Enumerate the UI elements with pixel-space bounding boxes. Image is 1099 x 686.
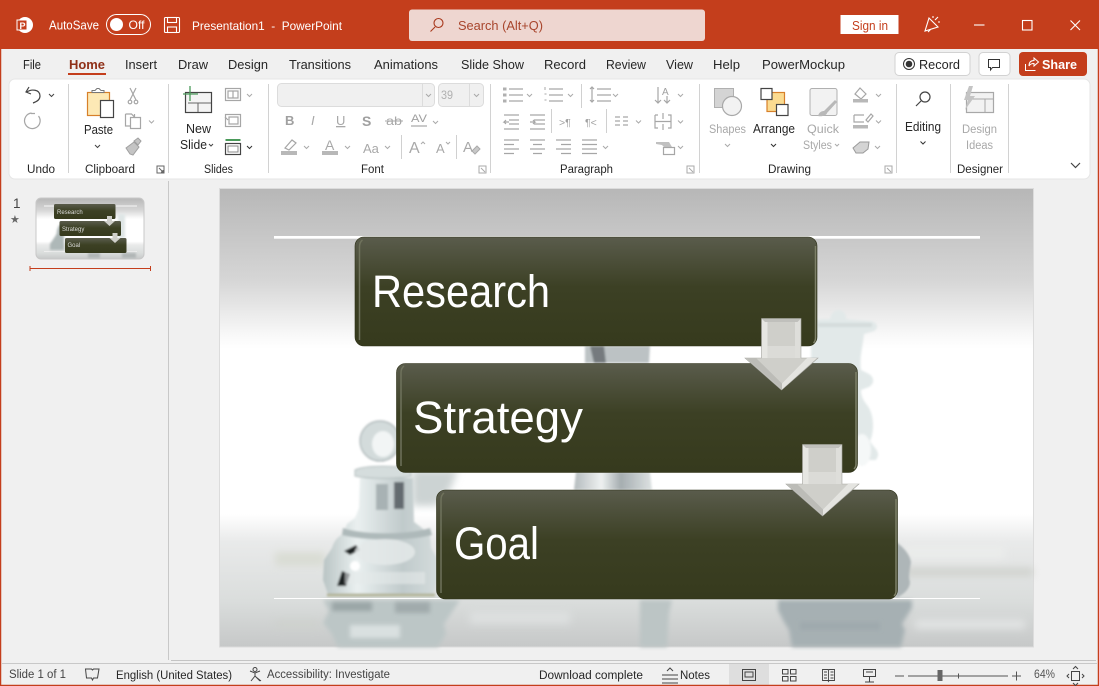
thumbnail position indicator <box>30 266 150 271</box>
accessibility status: Accessibility: Investigate <box>267 669 390 681</box>
group: slides: Slide <box>180 138 207 152</box>
group: font: A <box>463 139 473 156</box>
record button <box>895 52 970 76</box>
group: slides: Slides <box>204 164 233 176</box>
star marker: ★ <box>10 214 20 226</box>
ribbon tabs: View <box>666 58 694 72</box>
group: font: A <box>436 141 445 156</box>
group: slides: New <box>186 122 212 136</box>
slide count: Slide 1 of 1 <box>9 669 66 681</box>
group: font: AV <box>411 113 428 125</box>
group: font: ab <box>386 114 402 128</box>
step: Research <box>355 237 817 346</box>
slide thumbnail <box>36 198 144 259</box>
group: designer: Design <box>962 124 997 136</box>
icon: celebrate <box>925 16 940 32</box>
group: font: S <box>362 113 371 129</box>
right queen <box>811 310 878 466</box>
arrow: Research to Strategy <box>745 318 818 390</box>
step: Research: Research <box>372 266 550 317</box>
search box: Search (Alt+Q) <box>458 19 543 33</box>
group: font: Font <box>361 164 385 176</box>
group: slides <box>180 86 252 176</box>
ribbon tabs: File <box>23 58 41 72</box>
group: clipboard: Clipboard <box>85 164 135 176</box>
reflections <box>323 600 912 647</box>
collapse ribbon chevron <box>1071 163 1080 168</box>
group dividers <box>68 84 1008 173</box>
slide <box>220 188 1034 647</box>
zoom percent: 64% <box>1034 669 1055 681</box>
icon: spell check <box>86 669 99 680</box>
group: paragraph <box>503 84 694 176</box>
slide thumbnail: Strategy <box>62 227 84 233</box>
document title: Presentation1 - PowerPoint <box>192 19 343 33</box>
thumbnail pane <box>10 196 150 271</box>
ribbon tabs: Transitions <box>289 58 351 72</box>
ribbon tabs: Home <box>69 58 105 72</box>
ribbon tabs: Draw <box>178 58 209 72</box>
icon: PowerPoint logo: P <box>20 21 26 31</box>
autosave toggle: Off <box>128 18 145 32</box>
photo: glass chess pieces <box>275 310 1033 647</box>
group: clipboard <box>84 88 164 176</box>
group: font: 39 <box>441 90 453 102</box>
group: designer: Ideas <box>966 140 993 152</box>
group: drawing: Arrange <box>753 122 795 136</box>
group: drawing: Styles <box>803 140 832 152</box>
step: Goal: Goal <box>454 518 539 569</box>
group: clipboard: Paste <box>84 123 113 137</box>
group: paragraph: Paragraph <box>560 164 613 176</box>
slide thumbnail: Goal <box>68 243 80 249</box>
group: editing <box>905 92 941 144</box>
share button <box>1019 52 1087 76</box>
group: paragraph: >¶ <box>559 117 571 129</box>
group: drawing <box>709 88 892 176</box>
group: drawing: Quick <box>807 124 839 136</box>
ribbon tabs: Help <box>713 58 740 72</box>
notes button: Notes <box>680 670 710 682</box>
ribbon tabs <box>23 58 845 75</box>
group: paragraph: ¶< <box>585 117 597 129</box>
blurred second piece <box>412 470 458 506</box>
notes button <box>662 668 710 683</box>
ribbon tabs: Record <box>544 58 586 72</box>
ribbon tabs: Animations <box>374 58 438 72</box>
left pawn <box>323 421 437 595</box>
sign in button <box>840 15 898 34</box>
search box <box>409 10 705 41</box>
group: paragraph: A <box>662 87 669 98</box>
arrow: Strategy to Goal <box>786 444 859 516</box>
slide number: 1 <box>13 196 21 211</box>
group: designer: Designer <box>957 164 1003 176</box>
autosave label: AutoSave <box>49 18 99 32</box>
group: designer <box>957 86 1003 176</box>
icon: PowerPoint logo <box>17 17 33 33</box>
group: font: B <box>285 113 294 128</box>
ribbon tabs: Review <box>606 58 647 72</box>
slide thumbnail: Research <box>57 210 83 216</box>
ribbon tabs: Design <box>228 58 268 72</box>
view buttons <box>729 664 876 684</box>
share button: Share <box>1042 58 1077 72</box>
comments button <box>979 52 1010 76</box>
step: Strategy <box>396 364 858 472</box>
group: font: Aa <box>363 141 380 156</box>
group: font: A <box>409 140 420 157</box>
group: editing: Editing <box>905 120 941 134</box>
title bar <box>0 0 1099 49</box>
group: undo <box>25 87 55 176</box>
group: font: A <box>325 137 335 153</box>
step: Strategy: Strategy <box>413 392 583 443</box>
ribbon tabs: PowerMockup <box>762 58 845 72</box>
group: font: U <box>336 113 345 128</box>
language: English (United States) <box>116 670 232 682</box>
top rule <box>274 236 980 239</box>
autosave toggle <box>106 14 150 34</box>
window controls <box>974 20 1080 30</box>
icon: fit to window <box>1067 666 1084 686</box>
floor streaks <box>275 547 1033 629</box>
group: font <box>278 84 486 176</box>
ribbon panel <box>9 79 1090 179</box>
group: drawing: Shapes <box>709 124 746 136</box>
zoom slider <box>895 670 1021 681</box>
slide background <box>220 189 1033 647</box>
ribbon tabs: Insert <box>125 58 158 72</box>
group: font: I <box>311 113 315 128</box>
ribbon tabs: Slide Show <box>461 58 525 72</box>
middle piece <box>574 346 652 490</box>
download status: Download complete <box>539 670 643 682</box>
status bar <box>2 660 1097 686</box>
icon: save <box>164 18 180 32</box>
icon: accessibility <box>250 668 261 681</box>
step: Goal <box>436 490 898 599</box>
right piece base <box>896 542 911 598</box>
group: undo: Undo <box>27 164 55 176</box>
group: drawing: Drawing <box>768 164 811 176</box>
bottom rule <box>274 598 980 599</box>
slide pane divider <box>168 181 170 660</box>
sign in button: Sign in <box>852 19 888 33</box>
record button: Record <box>919 58 960 72</box>
